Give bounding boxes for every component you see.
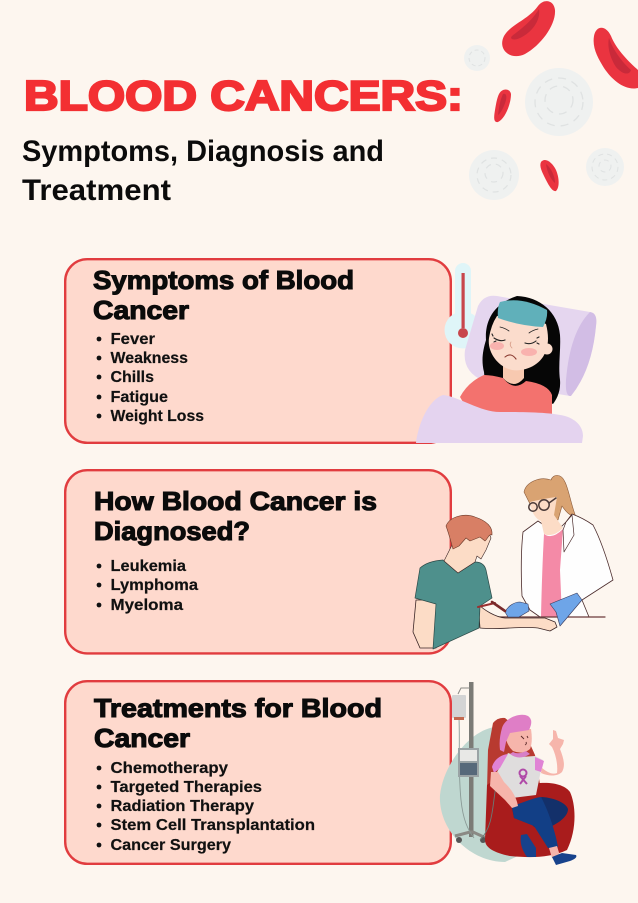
patient left arm — [490, 772, 518, 808]
heading: symptoms: Cancer — [93, 295, 189, 325]
icon: white blood cell lower left — [469, 150, 519, 200]
blush — [490, 342, 537, 356]
list: treatments — [97, 760, 315, 854]
face — [489, 315, 548, 370]
coat lapel — [563, 515, 574, 552]
shin — [549, 846, 560, 858]
shirt — [460, 375, 552, 414]
list: treatments: Chemotherapy — [110, 760, 228, 777]
shoe right — [552, 853, 576, 865]
list: diagnosis: Leukemia — [110, 558, 186, 575]
subtitle: Symptoms, Diagnosis and — [22, 135, 384, 168]
list: diagnosis — [97, 558, 198, 614]
glasses — [529, 498, 556, 511]
icon: thermometer — [444, 263, 482, 348]
patient right arm and thumb — [541, 730, 564, 776]
heading: symptoms — [93, 265, 354, 325]
heading: treatments: Cancer — [94, 723, 190, 753]
heading: treatments: Treatments for Blood — [94, 693, 382, 723]
list: treatments: Cancer Surgery — [110, 837, 231, 854]
chair back — [487, 718, 541, 790]
patient right arm — [478, 604, 557, 631]
infusion pump — [458, 748, 479, 777]
panel: symptoms — [65, 259, 451, 443]
list: treatments: Stem Cell Transplantation — [110, 817, 315, 834]
doctor shirt — [541, 529, 563, 617]
illustration: patient receiving infusion — [440, 682, 576, 865]
doctor neck and face — [530, 497, 563, 535]
patient hair — [446, 515, 492, 549]
pillow — [465, 296, 596, 396]
patient shirt — [415, 560, 492, 649]
patient bandana — [500, 715, 531, 752]
illustration: doctor drawing blood — [413, 475, 613, 649]
subtitle: Treatment — [22, 174, 171, 207]
table line — [492, 616, 605, 618]
patient front leg — [512, 797, 558, 848]
green backdrop — [440, 727, 520, 862]
list: symptoms: Fever — [110, 331, 155, 348]
ear — [542, 344, 552, 354]
icon: red blood cell small bottom — [540, 160, 559, 191]
list: symptoms: Weakness — [110, 350, 188, 367]
illustration: sick girl in bed — [416, 296, 596, 443]
heading: diagnosis — [94, 486, 377, 546]
list: symptoms: Chills — [110, 369, 154, 386]
iv bag and line — [452, 695, 474, 838]
icon: red blood cell top — [502, 1, 555, 56]
icon: white blood cell lower right — [586, 148, 624, 186]
iv pole — [455, 682, 486, 843]
patient left arm — [413, 600, 440, 648]
right glove — [550, 593, 582, 626]
list: diagnosis: Lymphoma — [110, 577, 198, 594]
patient neck and head — [444, 525, 491, 573]
doctor hair — [524, 475, 576, 520]
patient t-shirt — [497, 753, 543, 798]
chair seat — [485, 782, 575, 857]
list: diagnosis: Myeloma — [110, 597, 183, 614]
panel: diagnosis — [65, 470, 451, 653]
patient head — [505, 729, 532, 753]
panel: treatments — [65, 681, 451, 864]
decorative blood cells — [464, 1, 638, 200]
iv tube to arm — [480, 782, 497, 840]
ribbon — [520, 770, 527, 784]
subtitle — [22, 135, 384, 207]
headband — [498, 300, 547, 327]
title: BLOOD CANCERS: — [24, 72, 463, 119]
heading: diagnosis: How Blood Cancer is — [94, 486, 377, 516]
tourniquet and tube — [478, 602, 505, 611]
hair — [483, 296, 560, 404]
list: symptoms: Fatigue — [110, 389, 168, 406]
list: treatments: Targeted Therapies — [110, 779, 262, 796]
patient sleeves — [492, 754, 544, 773]
heading: symptoms: Symptoms of Blood — [93, 265, 354, 295]
left glove — [505, 602, 529, 617]
icon: red blood cell right — [594, 28, 638, 88]
list: symptoms: Weight Loss — [110, 408, 204, 425]
icon: white blood cell large — [525, 68, 593, 136]
list: treatments: Radiation Therapy — [110, 798, 254, 815]
collar — [510, 751, 530, 758]
heading: diagnosis: Diagnosed? — [94, 516, 250, 546]
heading: treatments — [94, 693, 382, 753]
patient back leg — [512, 797, 568, 838]
list: symptoms — [97, 331, 204, 425]
doctor coat — [521, 514, 613, 617]
icon: red blood cell small left — [494, 90, 511, 122]
face details — [492, 327, 539, 359]
icon: white blood cell small top — [464, 45, 490, 71]
neck — [503, 362, 524, 384]
blanket — [416, 395, 583, 443]
patient face — [521, 736, 528, 745]
shoe left — [521, 834, 536, 857]
